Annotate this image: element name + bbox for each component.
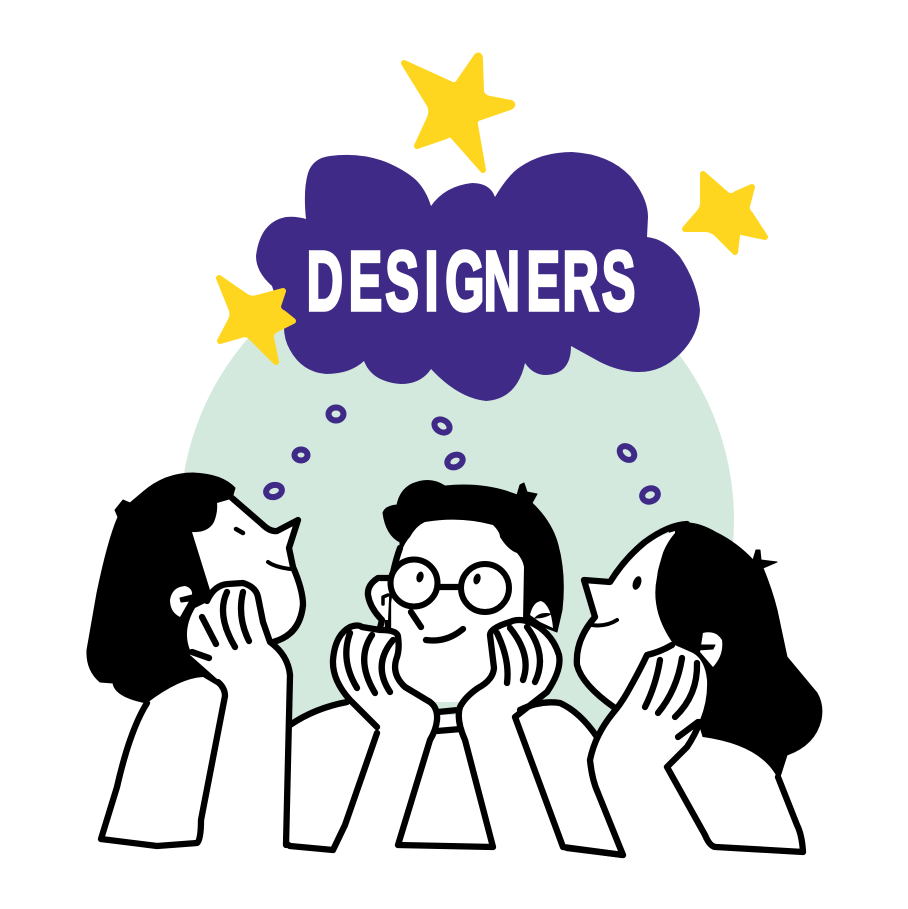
idea bubbles bbox=[265, 408, 660, 504]
right woman eye bbox=[631, 575, 643, 591]
left woman ear bbox=[170, 586, 192, 617]
right woman hand outline bbox=[567, 645, 672, 855]
right woman smile bbox=[592, 620, 617, 625]
man right ear bbox=[530, 601, 553, 628]
star: top bbox=[404, 56, 512, 170]
man outline bbox=[333, 620, 623, 855]
left woman finger lines bbox=[192, 592, 249, 658]
man face bbox=[388, 520, 524, 702]
right woman profile bbox=[577, 524, 687, 708]
man smile bbox=[426, 629, 463, 641]
stars bbox=[219, 56, 765, 362]
left woman torso bbox=[100, 677, 225, 843]
cloud with title bbox=[256, 152, 700, 401]
man body bbox=[285, 700, 623, 855]
man face edge bbox=[388, 548, 400, 628]
left woman hair bbox=[87, 473, 240, 703]
man pupils bbox=[415, 571, 425, 583]
man left sleeve bbox=[285, 725, 377, 850]
left woman eye bbox=[236, 529, 243, 533]
left woman hand outline bbox=[207, 583, 290, 845]
glasses bbox=[390, 560, 509, 612]
person: woman on the right bbox=[567, 523, 822, 855]
left woman hand and arm fill bbox=[187, 582, 290, 850]
title: DESIGNERS bbox=[307, 234, 635, 328]
man right shoulder bbox=[520, 702, 597, 737]
star: left bbox=[219, 278, 293, 362]
right woman finger lines bbox=[645, 658, 698, 737]
person: woman on the left bbox=[87, 473, 303, 850]
right woman torso bbox=[667, 737, 803, 852]
star: right bbox=[685, 174, 765, 252]
man collar bbox=[437, 710, 461, 731]
left woman torso outline bbox=[101, 682, 225, 846]
man left ear bbox=[368, 578, 390, 620]
cloud shape bbox=[256, 152, 700, 401]
man hair bbox=[383, 480, 563, 632]
man right fingers bbox=[497, 627, 540, 683]
right woman hand and arm fill bbox=[590, 643, 713, 855]
right woman ear bbox=[700, 632, 722, 667]
right woman hair bbox=[650, 523, 822, 777]
left woman mouth bbox=[268, 562, 290, 569]
left woman face bbox=[192, 499, 303, 642]
background circle bbox=[180, 243, 734, 797]
right woman face bbox=[577, 531, 675, 710]
person: man in the middle bbox=[285, 480, 623, 855]
man left shoulder bbox=[290, 702, 347, 725]
right woman torso outline bbox=[667, 722, 803, 852]
man left hand fill bbox=[333, 626, 437, 845]
man left fingers bbox=[346, 633, 393, 693]
left woman profile bbox=[232, 498, 303, 642]
man right hand fill bbox=[459, 620, 563, 847]
man nose bbox=[411, 612, 421, 627]
